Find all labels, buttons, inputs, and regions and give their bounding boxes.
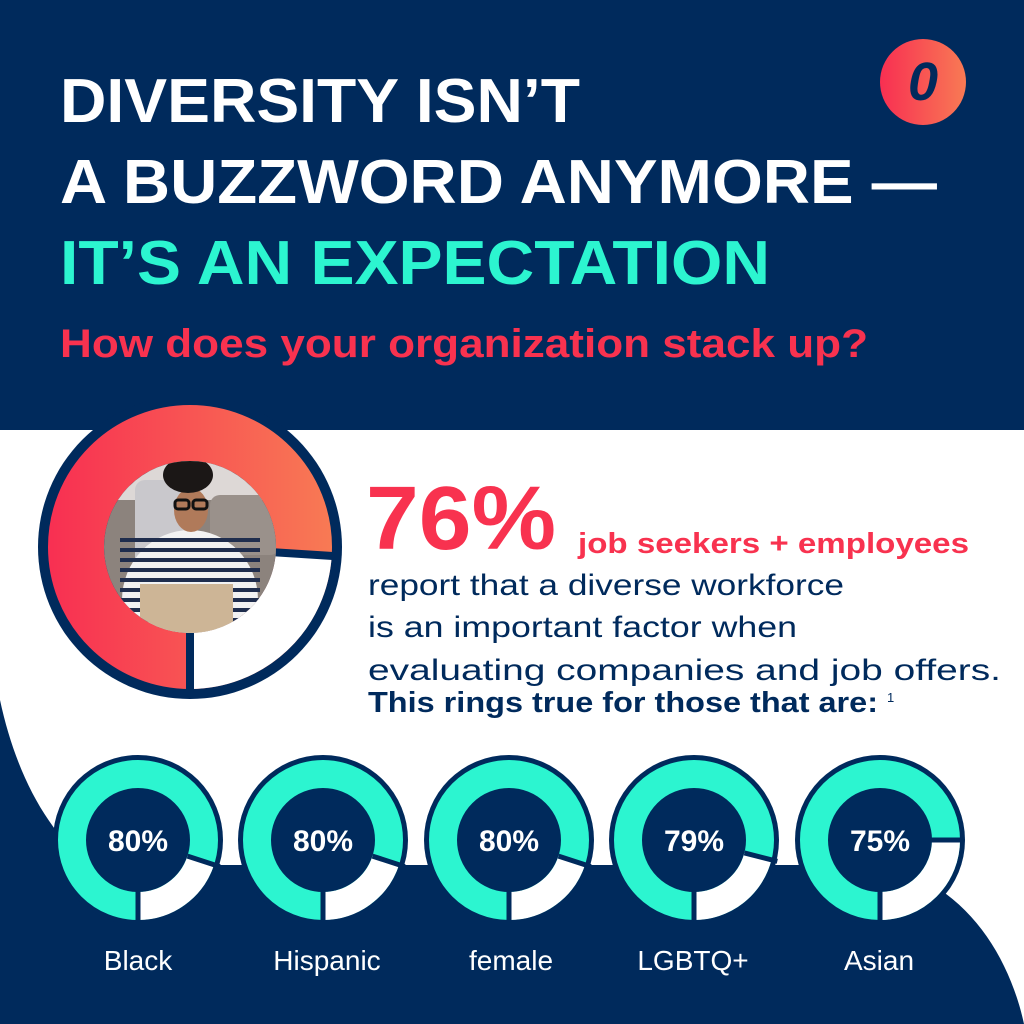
donut: Black 80%: 80% (108, 825, 168, 858)
donut: LGBTQ+ 79%: LGBTQ+ (637, 945, 749, 976)
stat 76%: job seekers + employees (577, 528, 969, 560)
stat 76% (366, 469, 969, 569)
donut: Hispanic 80%: Hispanic (273, 945, 381, 976)
description text: 1 (887, 690, 894, 705)
description text (368, 569, 1001, 719)
donut: LGBTQ+ 79% (609, 755, 779, 976)
donut: Hispanic 80% (238, 755, 408, 976)
title: DIVERSITY ISN’T (60, 67, 580, 136)
stat 76%: 76% (366, 469, 556, 569)
photo (104, 461, 276, 633)
donut: female 80% (424, 755, 594, 976)
description text: is an important factor when (368, 611, 797, 644)
donut: LGBTQ+ 79%: 79% (664, 825, 724, 858)
donut: female 80%: 80% (479, 825, 539, 858)
subtitle: How does your organization stack up? (60, 322, 868, 366)
donut: Black 80%: Black (104, 945, 173, 976)
donut: Hispanic 80%: 80% (293, 825, 353, 858)
title (60, 67, 937, 298)
donut: Asian 75%: 75% (850, 825, 910, 858)
header background (0, 0, 1024, 430)
donut: female 80%: female (469, 945, 553, 976)
title: A BUZZWORD ANYMORE — (60, 148, 937, 217)
donut: Asian 75%: Asian (844, 945, 914, 976)
big donut chart 76% (38, 395, 342, 699)
donut: Asian 75% (795, 755, 965, 976)
logo (880, 39, 966, 125)
bottom navy shape (0, 700, 1024, 1024)
description text: This rings true for those that are: (368, 687, 878, 719)
description text: report that a diverse workforce (368, 569, 844, 602)
description text: evaluating companies and job offers. (368, 654, 1001, 687)
title: IT’S AN EXPECTATION (60, 229, 770, 298)
logo: 0 (908, 52, 938, 112)
donut: Black 80% (53, 755, 223, 976)
